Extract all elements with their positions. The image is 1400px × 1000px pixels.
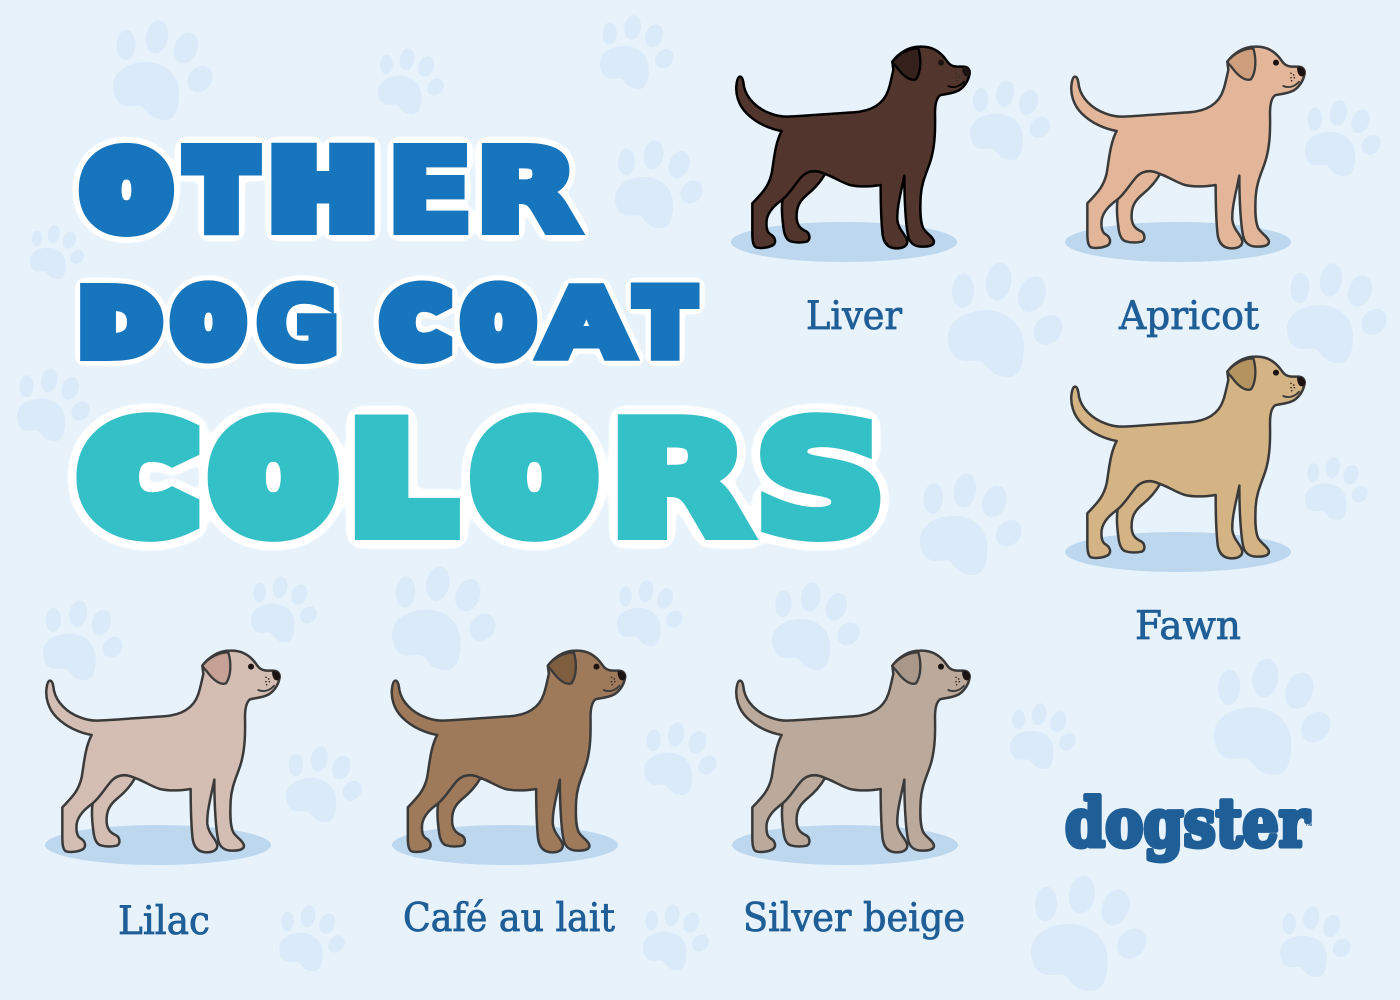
- title line: DOG COAT: [80, 268, 693, 382]
- title line: DOG COAT: O: [176, 277, 241, 372]
- dog card: Silver beige: [732, 651, 970, 941]
- title line: DOG COAT: A: [541, 270, 632, 378]
- title line: OTHER: T: [189, 132, 254, 250]
- title line: COLORS: O: [217, 405, 329, 555]
- dog: apricot: [1071, 47, 1305, 248]
- dog card: Lilac: [45, 651, 280, 944]
- label: Silver beige: Silver beige: [743, 896, 965, 941]
- title line: DOG COAT: D: [80, 275, 159, 374]
- title line: DOG COAT: G: [257, 268, 339, 382]
- title line: OTHER: H: [271, 132, 375, 250]
- dog: silver beige: [736, 651, 970, 852]
- title line: DOG COAT: T: [637, 272, 693, 375]
- shadow: [45, 825, 271, 865]
- title line: COLORS: S: [755, 392, 885, 570]
- title line: DOG COAT: C: [385, 275, 448, 373]
- title line: OTHER: E: [386, 125, 473, 259]
- label: Fawn: Fawn: [1135, 604, 1241, 649]
- logo: dogster: ™: [1305, 822, 1313, 831]
- dog: fawn: [1071, 357, 1305, 558]
- title line: COLORS: C: [87, 405, 191, 555]
- shadow: [1065, 222, 1291, 262]
- title line: OTHER: O: [86, 137, 167, 245]
- label: Liver: Liver: [806, 294, 902, 339]
- dog: lilac: [46, 651, 280, 852]
- dog card: Liver: [731, 47, 970, 339]
- dog card: Fawn: [1065, 357, 1305, 649]
- logo: dogster: dogster: [1065, 784, 1310, 862]
- dog: liver: [736, 47, 970, 248]
- title line: COLORS: O: [480, 405, 589, 555]
- label: Apricot: Apricot: [1118, 294, 1259, 339]
- title line: COLORS: L: [353, 398, 452, 563]
- label: Lilac: Lilac: [118, 899, 210, 944]
- dog card: Apricot: [1065, 47, 1305, 339]
- shadow: [731, 222, 957, 262]
- title line: DOG COAT: O: [466, 277, 531, 372]
- title line: COLORS: R: [608, 389, 751, 571]
- dog: cafe au lait: [392, 651, 626, 852]
- label: Cafe au lait: Café au lait: [403, 896, 615, 941]
- title line: COLORS: [87, 389, 885, 571]
- shadow: [392, 825, 618, 865]
- shadow: [732, 825, 958, 865]
- title line: OTHER: R: [476, 126, 579, 257]
- shadow: [1065, 532, 1291, 572]
- title line: OTHER: [86, 125, 579, 259]
- dog card: Cafe au lait: [392, 651, 626, 941]
